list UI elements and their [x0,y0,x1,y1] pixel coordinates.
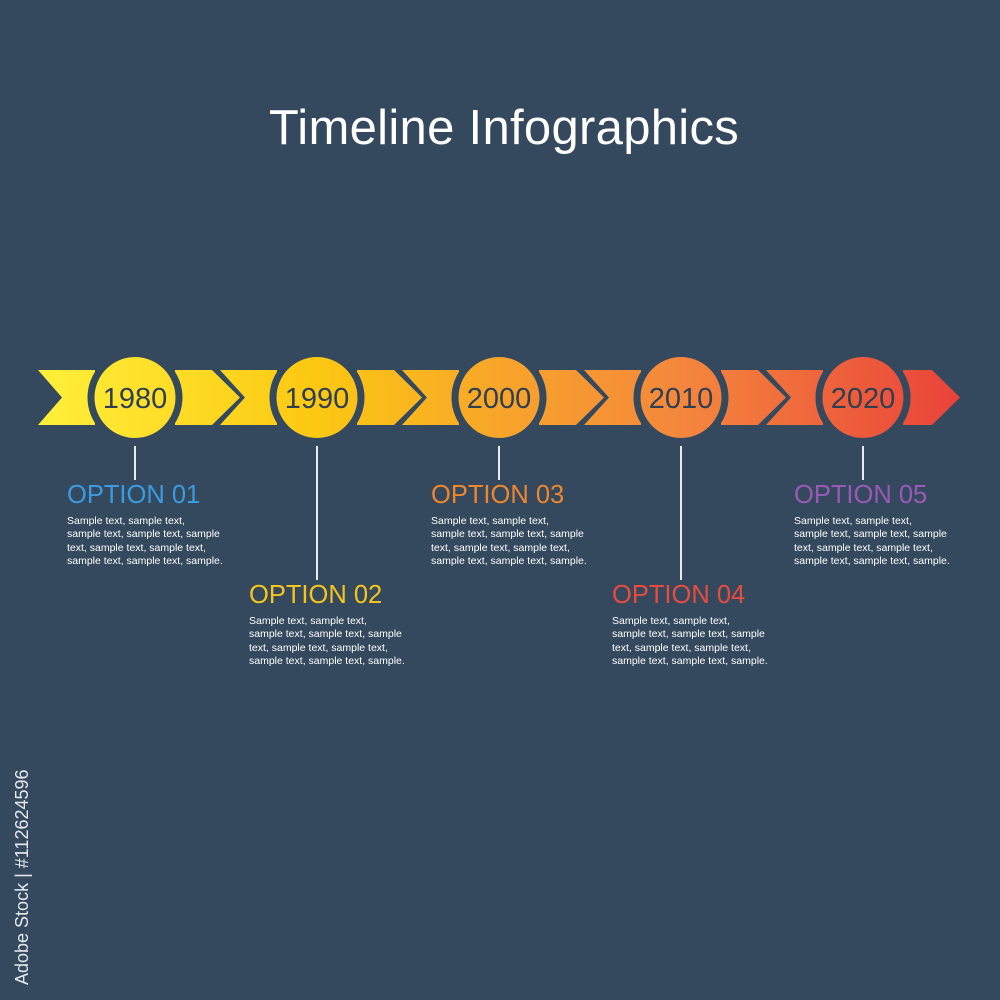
text: sample text, sample text, sample [794,528,947,540]
option 02: OPTION 02 [249,581,382,609]
text: sample text, sample text, sample [249,628,402,640]
text: sample text, sample text, sample. [612,655,768,667]
timeline band: 1990 [285,383,349,415]
option 01: OPTION 01 [67,481,200,509]
text: text, sample text, sample text, [794,542,933,554]
option 05: OPTION 05 [794,481,927,509]
text: sample text, sample text, sample. [249,655,405,667]
text: sample text, sample text, sample. [431,555,587,567]
option 04: OPTION 04 [612,581,745,609]
side watermark text: Adobe Stock | #112624596 [12,769,32,985]
timeline band: 2010 [649,383,713,415]
text: sample text, sample text, sample. [67,555,223,567]
text: Sample text, sample text, [249,615,367,627]
text: sample text, sample text, sample [612,628,765,640]
text: Sample text, sample text, [67,515,185,527]
text: Sample text, sample text, [612,615,730,627]
text: text, sample text, sample text, [67,542,206,554]
text: sample text, sample text, sample [431,528,584,540]
text: text, sample text, sample text, [612,642,751,654]
timeline band: 2000 [467,383,531,415]
text: text, sample text, sample text, [431,542,570,554]
text: sample text, sample text, sample [67,528,220,540]
circles [91,354,907,442]
option 03: OPTION 03 [431,481,564,509]
title: Timeline Infographics [269,101,739,155]
text: sample text, sample text, sample. [794,555,950,567]
text: Sample text, sample text, [431,515,549,527]
timeline band: 1980 [103,383,167,415]
text: text, sample text, sample text, [249,642,388,654]
timeline band: 2020 [831,383,895,415]
text: Sample text, sample text, [794,515,912,527]
